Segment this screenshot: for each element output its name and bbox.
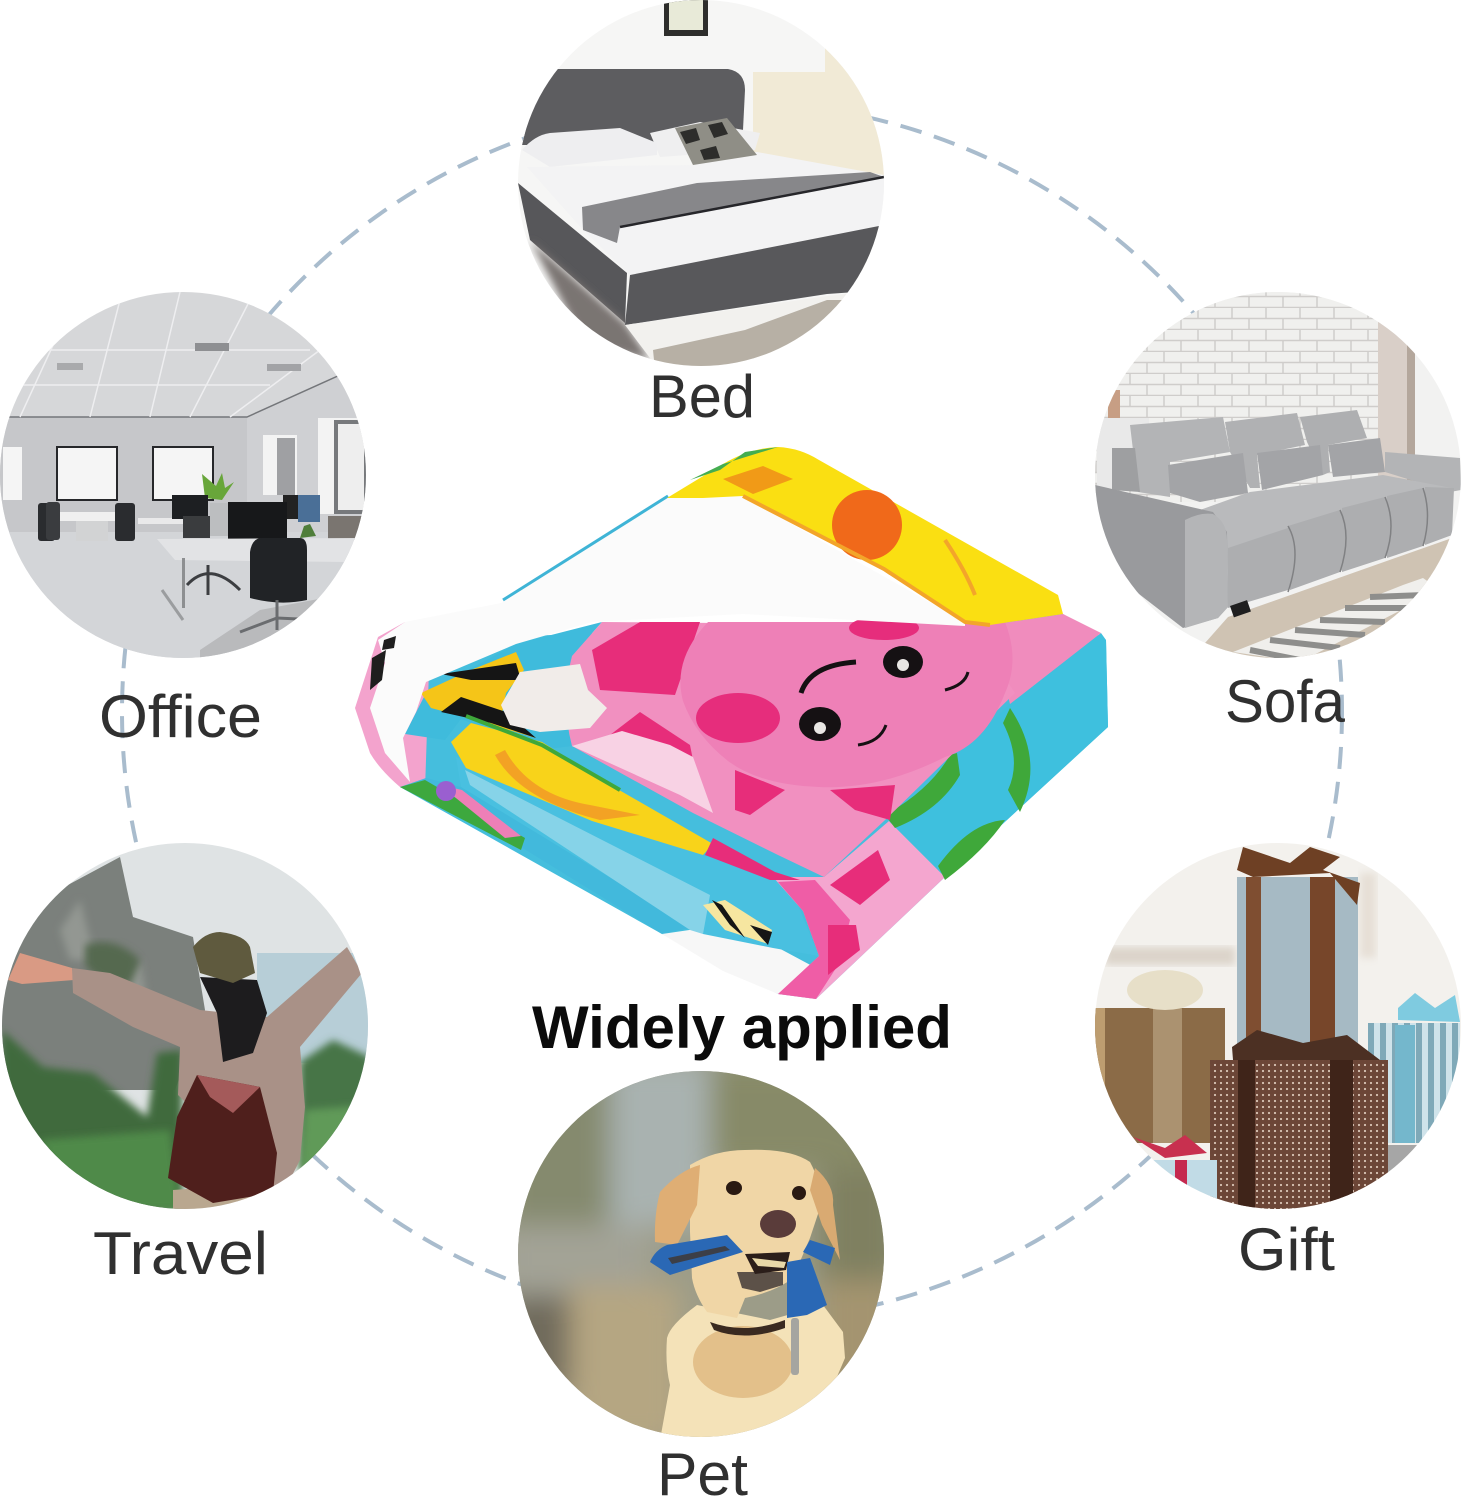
blanket: cyan top strip [405, 622, 602, 750]
eye right [883, 646, 923, 678]
blanket: zebra stripes [370, 636, 396, 690]
scene: bed [518, 0, 884, 370]
blanket: flap top colour corner [690, 447, 778, 480]
dashed ring connecting the scenes [122, 102, 1342, 1322]
scene: sofa [1095, 292, 1461, 662]
blanket: white fleece underside [370, 496, 965, 782]
blanket: cyan rolled fold [456, 757, 819, 956]
folded blanket [355, 447, 1108, 999]
blanket: outer left edge in pink [355, 622, 430, 790]
blanket: flap seam [743, 496, 990, 625]
blanket: cyan right panel [889, 633, 1108, 877]
blanket: bee [421, 652, 607, 738]
blanket: yellow lower fold [451, 723, 713, 855]
scene: office [0, 292, 366, 658]
blanket: white lower corner [662, 928, 816, 994]
blanket: inner pocket stripe [465, 770, 710, 934]
scene: pet [518, 1071, 884, 1437]
label: Office: Office [99, 683, 262, 750]
blanket: lower side layers [400, 778, 703, 934]
blanket: green stems [885, 708, 1030, 880]
label: Bed: Bed [649, 363, 755, 430]
brow [801, 662, 856, 693]
blanket: top-right pink corner [990, 614, 1101, 704]
smile left [858, 725, 886, 745]
cheek top [849, 616, 919, 640]
scene: gift [1095, 843, 1461, 1210]
blanket: orange petal [723, 466, 793, 494]
label: Travel: Travel [93, 1220, 268, 1287]
blanket: bottom pink flower [773, 821, 945, 999]
blanket: hot pink strip [705, 838, 800, 880]
blanket: cyan sliver behind fleece [503, 496, 668, 600]
blanket: flower face [680, 616, 1012, 787]
smile right [945, 672, 968, 690]
bee wing [501, 664, 607, 732]
eye left [799, 707, 841, 741]
cheek left [696, 693, 780, 743]
label: Sofa: Sofa [1225, 668, 1346, 735]
blanket: green seam [466, 716, 620, 790]
blanket: small bee at bottom fold [703, 900, 772, 944]
scene: travel [0, 843, 370, 1212]
label: Gift: Gift [1238, 1216, 1335, 1283]
blanket: base silhouette [400, 614, 1108, 999]
blanket: top yellow flap [667, 447, 1063, 625]
blanket: pale pink wing [572, 731, 713, 813]
title: Widely applied [532, 994, 952, 1061]
blanket: pink flower petals [566, 622, 1015, 877]
blanket: orange flower centre [832, 490, 902, 560]
